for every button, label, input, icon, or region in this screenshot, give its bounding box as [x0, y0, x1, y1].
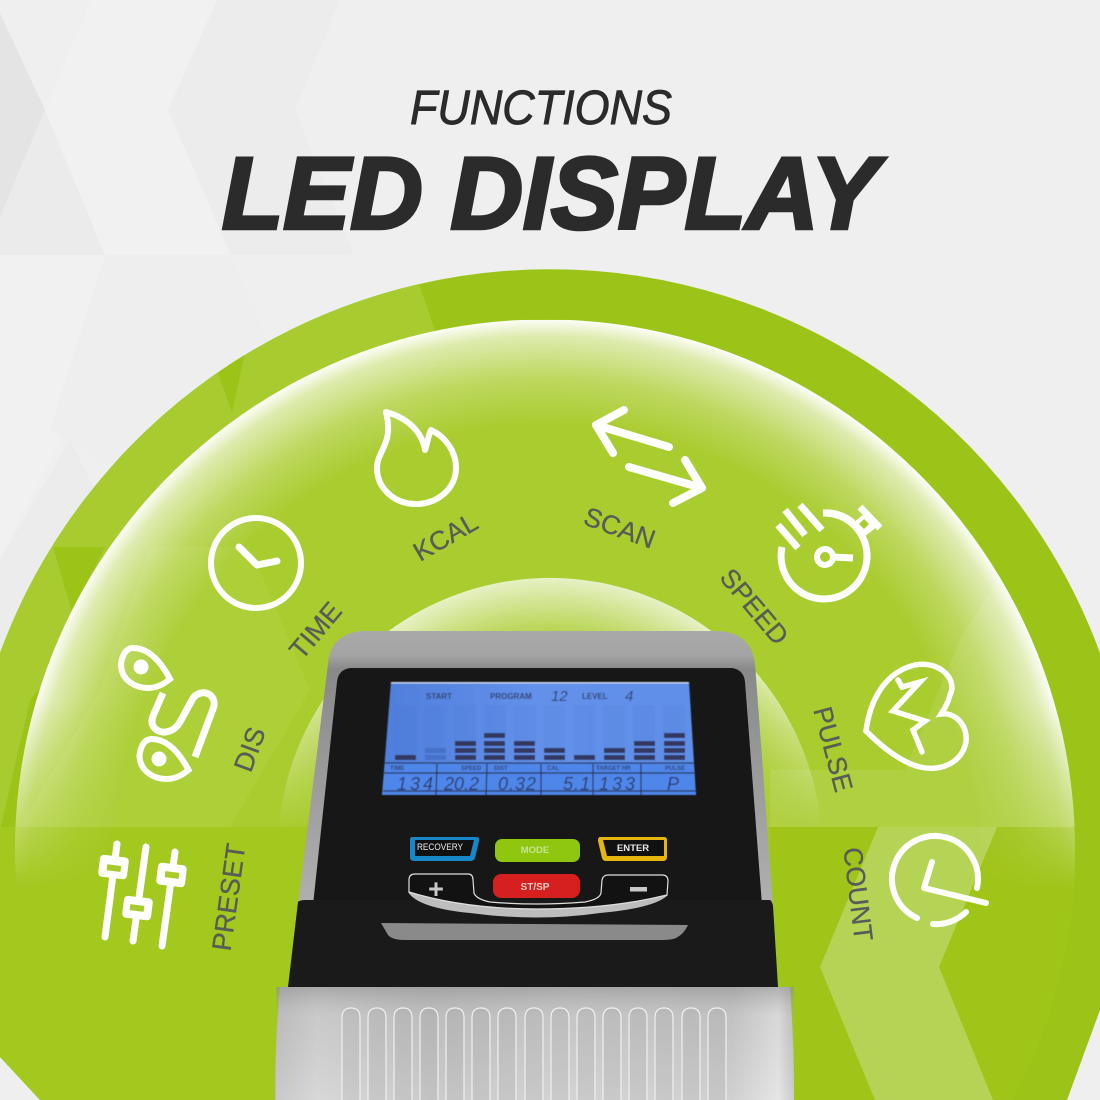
lcd bar chart: [395, 733, 685, 760]
icon: scan arrows: [596, 410, 702, 503]
icon: time clock: [211, 518, 301, 608]
lcd table digits: 20.2: [443, 774, 479, 794]
button: enter: [598, 837, 667, 861]
lcd table digits: 0.32: [498, 774, 537, 794]
lcd table digits: 133: [599, 774, 638, 794]
label: preset: PRESET: [207, 842, 251, 953]
lcd screen: [382, 682, 696, 795]
title: functions: FUNCTIONS: [410, 82, 672, 135]
lcd ghost columns: [394, 705, 685, 755]
label: pulse: PULSE: [807, 703, 859, 795]
button: mode: [495, 839, 580, 862]
lcd table labels: CAL: [547, 766, 560, 772]
button: st/sp: ST/SP: [521, 882, 550, 893]
lcd table digits: P: [667, 774, 679, 794]
lcd table labels: TIME: [390, 766, 404, 772]
button: enter: ENTER: [617, 843, 649, 854]
label: scan: SCAN: [580, 501, 659, 555]
label: count: COUNT: [837, 846, 879, 943]
lcd table digits: 134: [397, 774, 436, 794]
lcd table labels: SPEED: [461, 766, 482, 772]
silver base: [275, 987, 794, 1100]
icon: distance pins: [121, 648, 214, 779]
button: mode: MODE: [521, 845, 549, 856]
icon: speed stopwatch: [778, 505, 880, 599]
label: time: TIME: [284, 596, 348, 665]
lcd header text: PROGRAM: [490, 692, 532, 701]
black lower wedge: [288, 900, 778, 987]
icon: kcal flame: [377, 412, 456, 504]
lcd table labels: PULSE: [665, 766, 685, 772]
label: speed: SPEED: [714, 563, 795, 651]
icon: pulse heart: [866, 664, 966, 768]
inner light green disc with glossy rim: [0, 319, 1100, 1100]
lcd header text: START: [426, 692, 452, 701]
label: dis: DIS: [228, 723, 272, 776]
green outer ring: [0, 269, 1100, 1100]
lcd header text: LEVEL: [582, 692, 608, 701]
lcd header digits: 12: [551, 688, 568, 705]
lcd table labels: TARGET HR: [596, 766, 631, 772]
lcd table digits: 5.1: [563, 774, 591, 794]
black panel: [313, 668, 762, 905]
button group: plus and minus: +: [428, 874, 444, 904]
button: st/sp: [493, 874, 580, 898]
button: recovery: RECOVERY: [417, 842, 464, 853]
label: kcal: KCAL: [408, 507, 483, 567]
button: recovery: [410, 837, 479, 861]
icon: preset sliders: [98, 844, 187, 946]
lcd table labels: DIST: [494, 766, 508, 772]
lcd header text: [426, 692, 608, 701]
base ribs: [342, 1008, 726, 1100]
console body: [275, 631, 794, 1100]
button group: plus and minus: [408, 874, 668, 918]
lcd table digits: [397, 774, 679, 794]
lcd header digits: [551, 688, 633, 705]
lcd table labels: [390, 766, 685, 772]
grey strip: [381, 923, 688, 940]
lcd header digits: 4: [625, 688, 633, 705]
icon: count timer: [892, 836, 986, 924]
silver housing: [298, 631, 773, 905]
title: led display: LED DISPLAY: [222, 136, 886, 250]
lcd table lines: [383, 763, 696, 795]
